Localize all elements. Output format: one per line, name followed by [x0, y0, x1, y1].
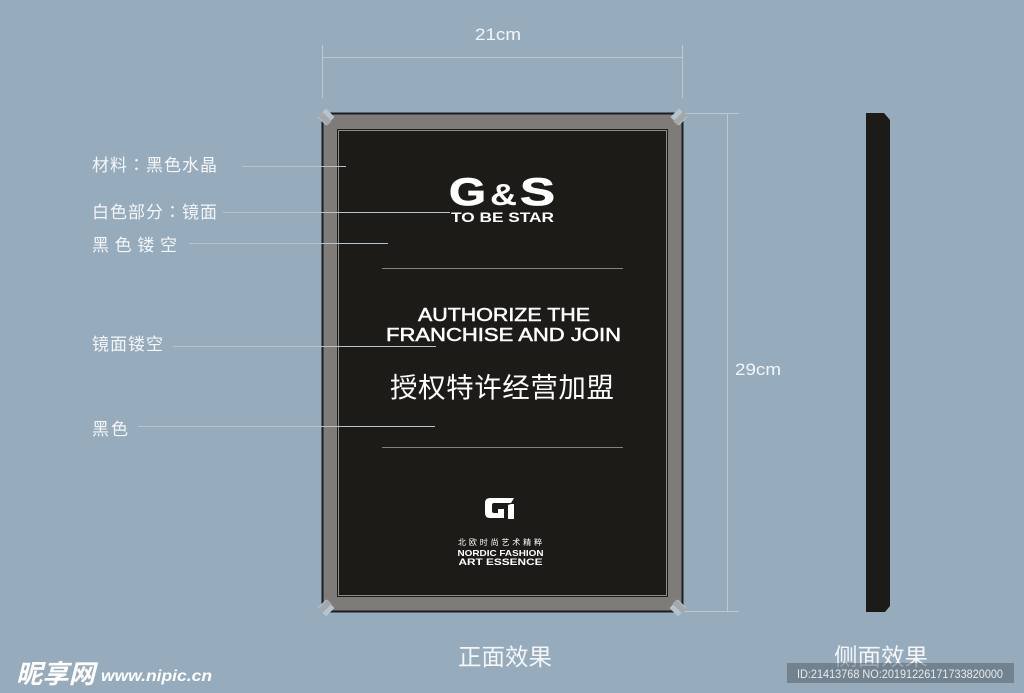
plaque black face	[337, 129, 668, 597]
annotation: mirror hollow: 镜面镂空	[92, 335, 163, 354]
heading: english	[386, 305, 621, 345]
side view plaque	[866, 113, 890, 612]
brand tagline: 北欧时尚艺术精粹	[458, 537, 542, 547]
icon: corner mounts	[317, 108, 688, 617]
logo: G&S: TO BE STAR	[451, 210, 554, 225]
brand tagline: ART ESSENCE	[458, 557, 542, 568]
logo: G&S	[449, 171, 555, 225]
panel: front plaque	[322, 114, 682, 612]
annotation: white part mirror: 白色部分：镜面	[92, 198, 217, 223]
watermark: ID strip: ID:21413768 NO:20191226171733820000	[797, 669, 1003, 681]
watermark: nipic logo	[16, 659, 212, 689]
annotation: material: 材料：黑色水晶	[92, 151, 217, 176]
watermark: nipic logo: www.nipic.cn	[101, 668, 212, 685]
brand tagline: NORDIC FASHION	[458, 548, 544, 558]
logo: G&S: G	[449, 171, 486, 214]
dimension: height 29cm: 29cm	[735, 360, 781, 379]
annotation: black hollow: 黑色镂空	[92, 236, 177, 255]
heading: english: FRANCHISE AND JOIN	[386, 325, 621, 345]
watermark: ID strip	[787, 663, 1014, 683]
caption: side view: 侧面效果	[834, 644, 928, 670]
logo: G&S: &	[490, 177, 517, 212]
brand tagline	[458, 537, 544, 568]
inner mirror line	[338, 130, 666, 596]
logo: G&S: S	[520, 171, 555, 214]
divider bottom	[382, 446, 623, 448]
watermark: nipic logo: 昵享网	[16, 659, 99, 689]
caption: front view: 正面效果	[458, 644, 552, 670]
divider top	[382, 268, 623, 270]
plaque frame	[322, 114, 682, 612]
dimension: width 21cm: 21cm	[475, 25, 521, 44]
heading: chinese: 授权特许经营加盟	[390, 372, 614, 403]
heading: english: AUTHORIZE THE	[418, 305, 590, 325]
icon: G logo	[485, 498, 514, 519]
annotation: black: 黑色	[92, 420, 128, 439]
